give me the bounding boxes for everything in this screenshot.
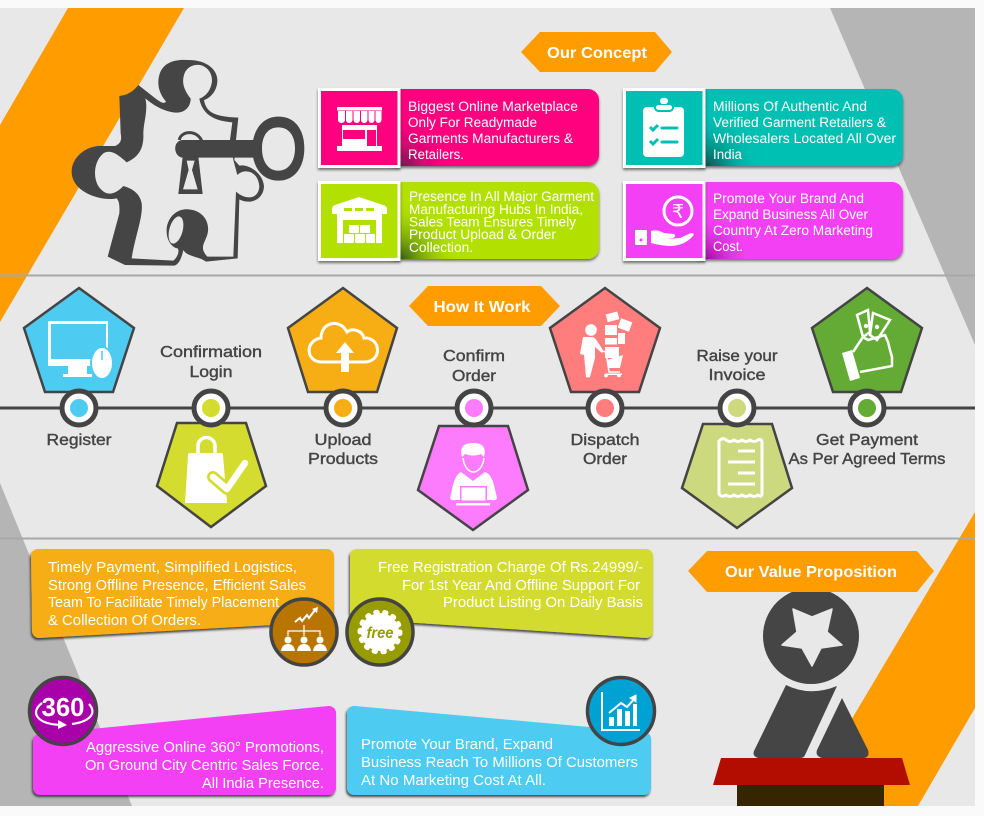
icon: 360 badge: 360 — [42, 692, 84, 722]
text: promote brand: Expand Business All Over — [713, 207, 868, 222]
icon: puzzle piece with key — [72, 60, 304, 266]
icon: computer and mouse — [48, 321, 113, 379]
label: Raise your Invoice: Invoice — [708, 367, 766, 384]
marker: upload — [326, 391, 360, 425]
icon: shopping bag with check — [185, 438, 245, 503]
text: promote brand reach: Business Reach To Millions Of Customers — [361, 755, 638, 771]
panel: manufacturing hubs card — [320, 182, 599, 260]
panel: retailers card — [624, 89, 903, 166]
text: marketplace — [408, 99, 578, 162]
icon: storefront — [337, 107, 382, 151]
text: timely payment: Strong Offline Presence, Efficient Sales — [48, 578, 306, 594]
icon: man with loaded cart — [580, 311, 632, 378]
panel: promote brand reach — [354, 678, 654, 789]
step 6: Raise your Invoice — [682, 348, 792, 528]
orange diagonal band: top left — [0, 8, 184, 322]
icon: trophy award — [713, 588, 910, 806]
pentagon: order — [418, 426, 528, 530]
icon: rupee in hand: ₹ — [672, 201, 684, 223]
icon: rupee in hand — [635, 197, 694, 246]
icon: team growth badge — [271, 599, 337, 665]
text: online promotions: On Ground City Centric Sales Force. — [85, 758, 324, 774]
label: Raise your Invoice: Raise your — [696, 348, 778, 365]
banner: Our Value Proposition — [688, 551, 934, 592]
text: free registration: Product Listing On Daily Basis — [443, 595, 643, 611]
text: manufacturing hubs: Collection. — [409, 240, 473, 255]
text: promote brand reach: At No Marketing Cost At All. — [361, 773, 546, 789]
text: retailers: Millions Of Authentic And — [713, 99, 867, 114]
marker: register — [62, 391, 96, 425]
icon: warehouse — [332, 197, 387, 243]
icon: receipt — [719, 439, 762, 496]
banner: How It Work — [409, 286, 560, 326]
marker: order — [457, 391, 491, 425]
text: manufacturing hubs: Presence In All Major Garment — [409, 189, 594, 204]
text: online promotions — [85, 740, 324, 792]
banner: How It Work: How It Work — [434, 299, 531, 316]
text: retailers: India — [713, 147, 742, 162]
gray wedge: bottom left — [0, 483, 132, 806]
icon: growth chart badge — [588, 678, 654, 744]
banner: Our Value Proposition: Our Value Proposition — [725, 564, 897, 581]
step 5: Dispatch Order — [550, 288, 660, 468]
gray wedge: top right — [830, 8, 975, 345]
step 7: Get Payment — [788, 288, 946, 468]
panel: timely payment — [38, 556, 337, 665]
label: Register: Register — [46, 432, 112, 449]
label: Get Payment: As Per Agreed Terms — [788, 451, 946, 468]
text: retailers: Verified Garment Retailers & — [713, 115, 886, 130]
banner: Our Concept: Our Concept — [547, 45, 648, 62]
icon: hand holding money — [842, 310, 892, 381]
icon: free badge — [347, 599, 413, 665]
panel: promote brand card — [624, 182, 903, 260]
text: promote brand reach: Promote Your Brand, Expand — [361, 737, 553, 753]
panel: free registration — [347, 556, 646, 665]
text: promote brand: Country At Zero Marketing — [713, 223, 873, 238]
pentagon: dispatch — [550, 288, 660, 392]
pentagon: invoice — [682, 424, 792, 528]
panel: marketplace card — [320, 89, 599, 166]
pentagon: login — [157, 423, 266, 527]
text: marketplace: Only For Readymade — [408, 115, 537, 130]
label: Upload Products: Products — [308, 451, 378, 468]
label: Confirmation Login — [160, 344, 262, 381]
pentagon: register — [24, 288, 134, 392]
step 1: Register — [24, 288, 134, 449]
label: Get Payment: Get Payment — [816, 432, 919, 449]
text: timely payment — [48, 560, 306, 629]
label: Dispatch Order: Order — [583, 451, 627, 468]
label: Upload Products: Upload — [314, 432, 372, 449]
banner: Our Concept — [521, 32, 672, 72]
label: Confirm Order: Order — [452, 368, 496, 385]
text: promote brand: Cost. — [713, 239, 743, 254]
text: retailers: Wholesalers Located All Over — [713, 131, 897, 146]
text: manufacturing hubs: Manufacturing Hubs In India, — [409, 202, 583, 217]
text: retailers — [713, 99, 897, 162]
marker: invoice — [720, 391, 754, 425]
icon: 360 badge — [30, 678, 96, 744]
text: marketplace: Retailers. — [408, 147, 464, 162]
marker: login — [194, 391, 228, 425]
label: Upload Products — [308, 432, 378, 468]
text: online promotions: Aggressive Online 360° Promotions, — [86, 740, 324, 756]
label: Get Payment — [788, 432, 946, 468]
text: manufacturing hubs — [409, 189, 594, 255]
pentagon: upload — [288, 288, 397, 392]
text: free registration: For 1st Year And Offline Support For — [402, 578, 640, 594]
text: timely payment: & Collection Of Orders. — [48, 613, 201, 629]
label: Raise your Invoice — [696, 348, 778, 384]
marker: dispatch — [588, 391, 622, 425]
label: Confirm Order — [443, 348, 505, 385]
icon: cloud upload — [309, 323, 378, 372]
text: manufacturing hubs: Product Upload & Order — [409, 227, 557, 242]
icon: free badge: free — [366, 625, 394, 642]
orange diagonal band: bottom right — [800, 512, 975, 806]
text: free registration — [378, 560, 643, 611]
step 2: Confirmation Login — [157, 344, 266, 527]
label: Dispatch Order: Dispatch — [570, 432, 640, 449]
text: promote brand reach — [361, 737, 638, 789]
text: promote brand: Promote Your Brand And — [713, 191, 864, 206]
icon: clipboard checklist — [643, 98, 684, 157]
text: marketplace: Garments Manufacturers & — [408, 131, 573, 146]
panel: online promotions — [30, 678, 329, 792]
label: Dispatch Order — [570, 432, 640, 468]
text: marketplace: Biggest Online Marketplace — [408, 99, 578, 114]
text: online promotions: All India Presence. — [202, 776, 324, 792]
icon: person with laptop — [450, 443, 497, 506]
label: Confirm Order: Confirm — [443, 348, 505, 365]
step 3: Upload Products — [288, 288, 397, 468]
text: timely payment: Timely Payment, Simplified Logistics, — [48, 560, 297, 576]
text: free registration: Free Registration Charge Of Rs.24999/- — [378, 560, 643, 576]
text: promote brand — [713, 191, 873, 254]
text: manufacturing hubs: Sales Team Ensures Timely — [409, 214, 576, 230]
step 4: Confirm Order — [418, 348, 528, 530]
label: Confirmation Login: Login — [190, 364, 232, 381]
text: timely payment: Team To Facilitate Timely Placement — [48, 595, 279, 611]
label: Confirmation Login: Confirmation — [160, 344, 262, 361]
pentagon: payment — [812, 288, 922, 392]
marker: payment — [850, 391, 884, 425]
